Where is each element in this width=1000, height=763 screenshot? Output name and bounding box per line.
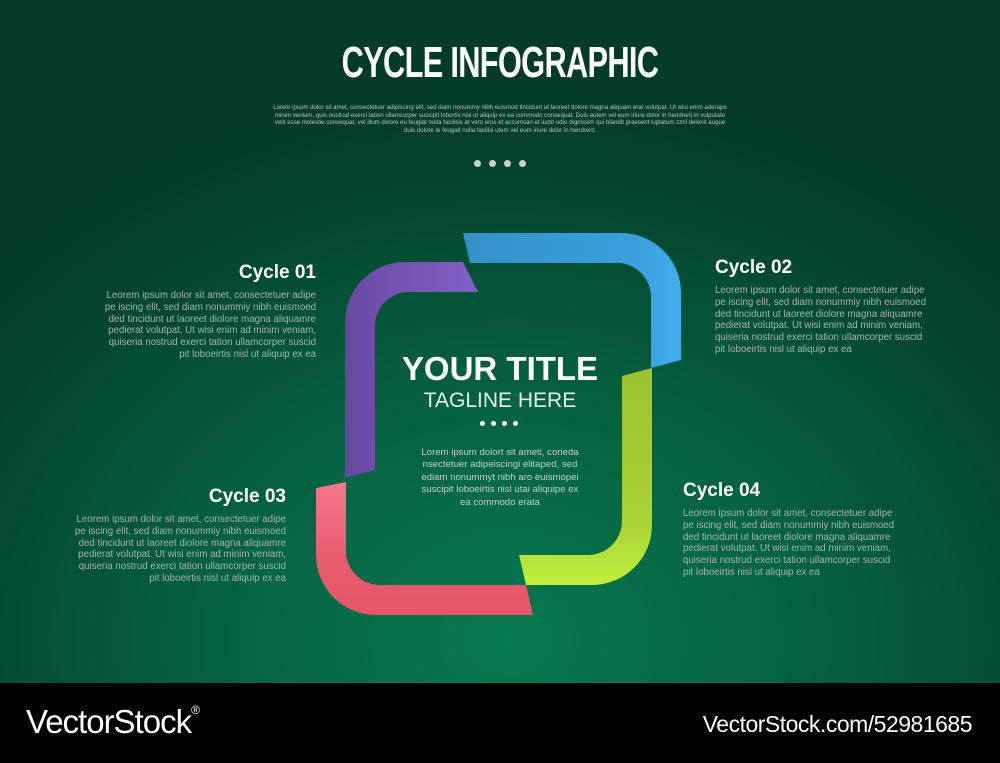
text 03 [75, 514, 286, 584]
intro text: minim veniam, quis nostrud exerci tation ullamcorper suscipit lobortis nisl ut aliquip ex ea commodo consequat. Duis autem vel eum iriure dolor in hendrerit in vulputate [275, 112, 725, 119]
center text: suscipit loboeirtis nisl utai aliquipe ex [422, 484, 578, 495]
text 04: pe iscing elit, sed diam nonummiy nibh euismoed [683, 520, 894, 531]
footer id: VectorStock.com/52981685 [703, 711, 972, 737]
center text [421, 447, 579, 508]
dots [474, 160, 526, 167]
text 03: pe iscing elit, sed diam nonummiy nibh euismoed [75, 526, 286, 537]
heading 03: Cycle 03 [209, 486, 286, 507]
segment: blue [463, 233, 681, 368]
text 03: quiseria nostrud exerci tation ullamcorper suscid [79, 561, 286, 572]
intro text: duis dolore te feugait nulla facilisi utem vel eum iriure dolor in hendrerit. [404, 127, 596, 134]
text 01: Leorem ipsum dolor sit amet, consectetuer adipe [107, 290, 316, 301]
text 04: ded tincidunt ut laoreet diolore magna aliquamre [683, 532, 890, 543]
intro text [273, 104, 727, 134]
tagline: TAGLINE HERE [424, 389, 576, 412]
text 01: pe iscing elit, sed diam nonummiy nibh euismoed [105, 302, 316, 313]
text 01: quiseria nostrud exerci tation ullamcorper suscid [109, 337, 316, 348]
panel: cycle 04 [683, 480, 894, 578]
title: CYCLE INFOGRAPHIC [342, 38, 658, 87]
footer logo: VectorStock® [26, 703, 199, 740]
text 01: pit loboeirtis nisl ut aliquip ex ea [179, 349, 316, 360]
heading 01: Cycle 01 [239, 262, 316, 283]
text 04: pit loboeirtis nisl ut aliquip ex ea [683, 567, 820, 578]
text 02: quiseria nostrud exerci tation ullamcorper suscid [715, 332, 922, 343]
text 02: pe iscing elit, sed diam nonummiy nibh euismoed [715, 297, 926, 308]
text 03: ded tincidunt ut laoreet diolore magna aliquamre [79, 538, 286, 549]
panel: cycle 03 [75, 486, 286, 584]
text 03: pedierat volutpat. Ut wisi enim ad minim veniam, [78, 549, 286, 560]
segment: pink [316, 482, 533, 615]
heading 04: Cycle 04 [683, 480, 760, 501]
segment: green [519, 368, 652, 585]
text 01: pedierat volutpat. Ut wisi enim ad minim veniam, [108, 325, 316, 336]
text 04: Leorem ipsum dolor sit amet, consectetuer adipe [683, 508, 892, 519]
text 04 [683, 508, 894, 578]
text 02 [715, 285, 926, 355]
segment: purple [345, 262, 478, 478]
text 04: quiseria nostrud exerci tation ullamcorper suscid [683, 555, 890, 566]
text 03: pit loboeirtis nisl ut aliquip ex ea [149, 573, 286, 584]
text 03: Leorem ipsum dolor sit amet, consectetuer adipe [77, 514, 286, 525]
center title: YOUR TITLE [402, 350, 598, 387]
center text: ediam nonummyt nibh aro euismopei [421, 472, 579, 483]
panel: cycle 02 [715, 257, 926, 355]
center text: ea commodo erata [460, 497, 540, 508]
text 04: pedierat volutpat. Ut wisi enim ad minim veniam, [683, 543, 891, 554]
text 01: ded tincidunt ut laoreet diolore magna aliquamre [109, 314, 316, 325]
text 02: pit loboeirtis nisl ut aliquip ex ea [715, 344, 852, 355]
text 02: ded tincidunt ut laoreet diolore magna aliquamre [715, 309, 922, 320]
center text: nsectetuer adipeiscingi elitaped, sed [423, 459, 577, 470]
center text: Lorem ipsum dolort sit ameti, corieda [421, 447, 579, 458]
intro text: velit esse molestie consequat, vel illum dolore eu feugiat nulla facilisis at vero eros et accumsan et iusto odio dignissim qui blandit praesent luptatum zzril delenit augue [275, 119, 725, 126]
panel: cycle 01 [105, 262, 316, 360]
text 02: Leorem ipsum dolor sit amet, consectetuer adipe [715, 285, 924, 296]
center dots [480, 421, 518, 426]
footer bar [0, 683, 1000, 763]
text 02: pedierat volutpat. Ut wisi enim ad minim veniam, [715, 320, 923, 331]
heading 02: Cycle 02 [715, 257, 792, 278]
intro text: Lorem ipsum dolor sit amet, consectetuer adipiscing elit, sed diam nonummy nibh euismod tincidunt ut laoreet dolore magna aliquam erat volutpat. Ut wisi enim aderape [273, 104, 727, 111]
text 01 [105, 290, 316, 360]
